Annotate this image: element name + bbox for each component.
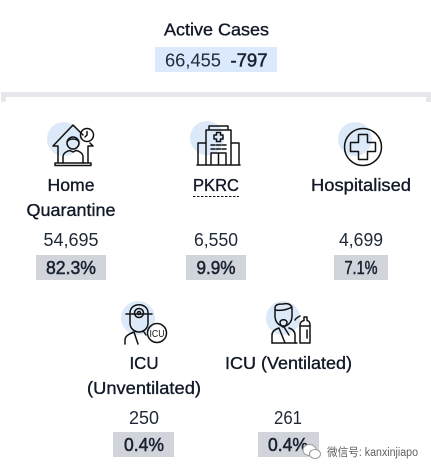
label: PKRC xyxy=(193,175,239,195)
count: 261 xyxy=(274,407,302,428)
icon: doctor with ICU badge: ICU xyxy=(150,329,164,340)
panel: ICU ventilated: 0.4% xyxy=(268,434,308,455)
icon: house with person xyxy=(47,122,94,166)
count: 54,695 xyxy=(44,229,98,250)
panel: ICU unventilated xyxy=(87,301,201,457)
panel: ICU ventilated xyxy=(225,301,352,457)
panel: ICU unventilated: 0.4% xyxy=(124,434,164,455)
active cases value xyxy=(155,47,277,72)
count: 4,699 xyxy=(339,229,383,250)
panel: home quarantine: 82.3% xyxy=(46,257,96,278)
title: Active Cases xyxy=(164,20,269,40)
bracket xyxy=(1,92,431,102)
percentage xyxy=(186,255,246,280)
panel: hospitalised xyxy=(311,122,411,280)
label: Hospitalised xyxy=(311,175,411,195)
label: ICU xyxy=(130,353,158,373)
percentage xyxy=(258,432,319,457)
icon: chat bubbles xyxy=(303,444,320,458)
icon: medical cross xyxy=(338,122,382,166)
panel: PKRC xyxy=(186,121,246,280)
label: Home xyxy=(48,175,94,195)
dashed underline xyxy=(193,196,239,198)
panel: hospitalised: 7.1% xyxy=(344,257,378,278)
panel: ICU unventilated: (Unventilated) xyxy=(87,378,201,398)
percentage xyxy=(36,255,106,280)
icon: hospital building xyxy=(190,121,240,165)
panel: PKRC: 9.9% xyxy=(196,257,236,278)
active cases value: 66,455 xyxy=(165,50,221,70)
label: ICU (Ventilated) xyxy=(225,353,352,373)
percentage xyxy=(334,255,388,280)
count: 6,550 xyxy=(194,229,238,250)
watermark xyxy=(303,444,418,459)
panel: home quarantine: Quarantine xyxy=(26,200,116,220)
icon: doctor with ICU badge xyxy=(121,301,166,344)
icon: patient with oxygen tank xyxy=(266,301,310,343)
percentage xyxy=(113,432,174,457)
watermark: 微信号: kanxinjiapo xyxy=(327,445,418,459)
count: 250 xyxy=(129,407,159,428)
panel: home quarantine xyxy=(26,122,116,280)
active cases value: -797 xyxy=(230,50,268,70)
